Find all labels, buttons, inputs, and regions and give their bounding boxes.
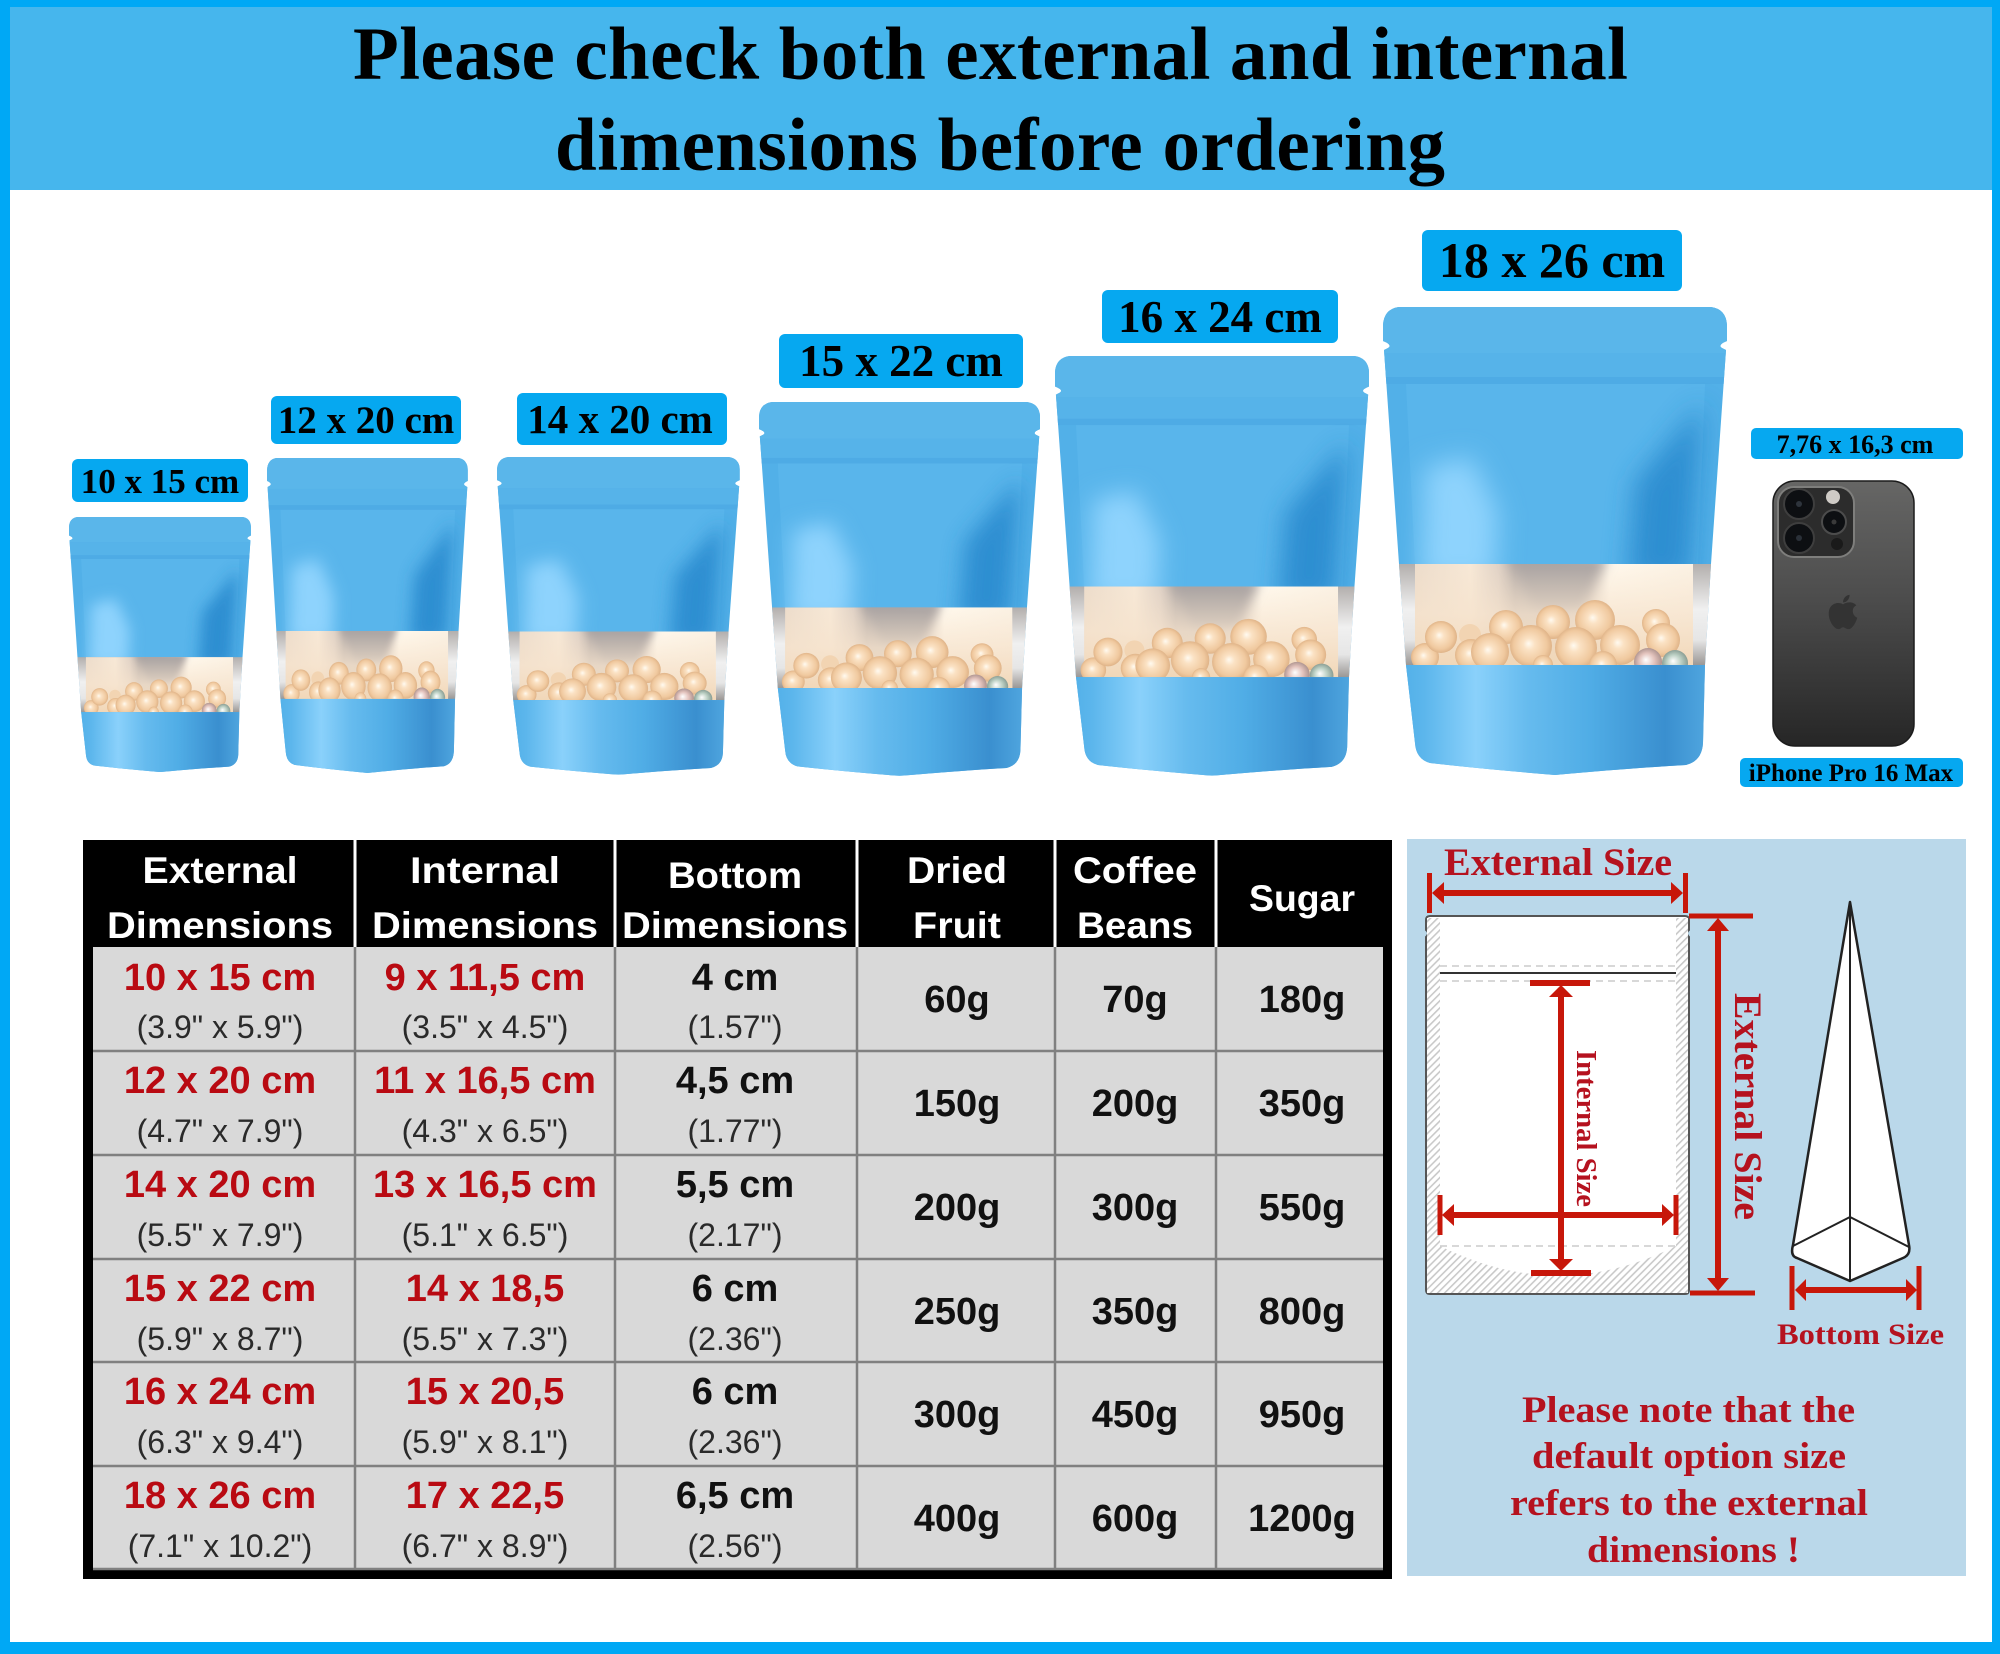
table header: Fruit: [913, 905, 1001, 946]
table row: 10 x 15 cm: 60g: [924, 979, 990, 1021]
table row: 14 x 20 cm: 550g: [1259, 1187, 1345, 1229]
size label: iPhone dimensions: 7,76 x 16,3 cm: [1777, 430, 1934, 459]
table row: 16 x 24 cm: 450g: [1092, 1394, 1178, 1436]
arrow: internal height: [1530, 983, 1591, 1273]
table row: 12 x 20 cm: (1.77"): [688, 1113, 782, 1149]
note text: default option size: [1532, 1436, 1846, 1477]
table row: 14 x 20 cm: 14 x 20 cm: [124, 1164, 316, 1206]
table header: Beans: [1077, 905, 1193, 946]
table row: 14 x 20 cm: 13 x 16,5 cm: [373, 1164, 597, 1206]
title: [353, 13, 1628, 187]
label: internal size: Internal Size: [1570, 1050, 1602, 1207]
pouch: 15 x 22 cm: [759, 402, 1040, 776]
table header: [107, 850, 1355, 946]
table header: Sugar: [1249, 878, 1355, 919]
table header: Internal: [410, 850, 560, 891]
table row: 18 x 26 cm: 17 x 22,5: [406, 1475, 564, 1517]
note text: refers to the external: [1510, 1483, 1868, 1524]
table row: 10 x 15 cm: [124, 957, 1345, 1045]
table row: 14 x 20 cm: 300g: [1092, 1187, 1178, 1229]
table row: 10 x 15 cm: (3.5" x 4.5"): [402, 1009, 568, 1045]
table row: 10 x 15 cm: 70g: [1102, 979, 1168, 1021]
table header: Coffee: [1073, 850, 1197, 891]
note text: Please note that the: [1522, 1390, 1855, 1431]
table row: 16 x 24 cm: 300g: [914, 1394, 1000, 1436]
table row: 14 x 20 cm: 200g: [914, 1187, 1000, 1229]
note text: [1510, 1390, 1868, 1571]
table row: 16 x 24 cm: 16 x 24 cm: [124, 1371, 316, 1413]
label: external size horizontal: External Size: [1444, 841, 1672, 884]
header band: [10, 7, 1992, 190]
table row: 14 x 20 cm: (5.1" x 6.5"): [402, 1217, 568, 1253]
pouch: 12 x 20 cm: [267, 458, 468, 773]
table row: 18 x 26 cm: 400g: [914, 1498, 1000, 1540]
table row: 12 x 20 cm: 4,5 cm: [676, 1060, 794, 1102]
pyramid gusset diagram: [1792, 902, 1909, 1281]
table row: 18 x 26 cm: (2.56"): [688, 1528, 782, 1564]
table row: 15 x 22 cm: (5.9" x 8.7"): [137, 1321, 303, 1357]
table row: 10 x 15 cm: 180g: [1259, 979, 1345, 1021]
arrow: internal width: [1440, 1195, 1676, 1235]
table row: 14 x 20 cm: (2.17"): [688, 1217, 782, 1253]
size label: iPhone Pro 16 Max: iPhone Pro 16 Max: [1749, 760, 1954, 787]
table row: 10 x 15 cm: 10 x 15 cm: [124, 957, 316, 999]
table row: 15 x 22 cm: 14 x 18,5: [406, 1268, 564, 1310]
table row: 12 x 20 cm: 11 x 16,5 cm: [374, 1060, 596, 1102]
table row: 12 x 20 cm: 350g: [1259, 1083, 1345, 1125]
arrow: external height: [1689, 916, 1755, 1293]
panel: size diagram: [1407, 839, 1966, 1576]
table row: 10 x 15 cm: 9 x 11,5 cm: [385, 957, 585, 999]
table row: 15 x 22 cm: (2.36"): [688, 1321, 782, 1357]
table row: 12 x 20 cm: 12 x 20 cm: [124, 1060, 316, 1102]
table row: 12 x 20 cm: 150g: [914, 1083, 1000, 1125]
table row: 15 x 22 cm: [124, 1268, 1345, 1357]
size label: 14 x 20 cm: 14 x 20 cm: [527, 396, 713, 442]
table row: 15 x 22 cm: 15 x 22 cm: [124, 1268, 316, 1310]
arrow: external width: [1430, 873, 1686, 913]
pouch: 14 x 20 cm: [497, 457, 740, 775]
size label: 12 x 20 cm: 12 x 20 cm: [278, 399, 454, 442]
table header: Dimensions: [107, 905, 333, 946]
table row: 10 x 15 cm: (3.9" x 5.9"): [137, 1009, 303, 1045]
table row: 15 x 22 cm: 800g: [1259, 1291, 1345, 1333]
table row: 18 x 26 cm: 600g: [1092, 1498, 1178, 1540]
title: dimensions before ordering: [555, 104, 1445, 187]
table row: 14 x 20 cm: (5.5" x 7.9"): [137, 1217, 303, 1253]
pouch outline diagram: [1426, 916, 1689, 1294]
note text: dimensions !: [1587, 1530, 1800, 1571]
pouch: 10 x 15 cm: [69, 517, 251, 772]
table row: 15 x 22 cm: 350g: [1092, 1291, 1178, 1333]
table row: 14 x 20 cm: 5,5 cm: [676, 1164, 794, 1206]
size label: 16 x 24 cm: 16 x 24 cm: [1118, 292, 1322, 342]
size label: 10 x 15 cm: 10 x 15 cm: [81, 462, 239, 501]
table row: 18 x 26 cm: [124, 1475, 1356, 1564]
table row: 18 x 26 cm: (7.1" x 10.2"): [128, 1528, 312, 1564]
table row: 18 x 26 cm: 18 x 26 cm: [124, 1475, 316, 1517]
label: bottom size: Bottom Size: [1777, 1318, 1944, 1351]
table row: 16 x 24 cm: 15 x 20,5: [406, 1371, 564, 1413]
table row: 16 x 24 cm: (5.9" x 8.1"): [402, 1424, 568, 1460]
table row: 12 x 20 cm: (4.3" x 6.5"): [402, 1113, 568, 1149]
table row: 12 x 20 cm: 200g: [1092, 1083, 1178, 1125]
icon: iPhone back: [1773, 481, 1914, 746]
title: Please check both external and internal: [353, 13, 1628, 96]
table row: 15 x 22 cm: 6 cm: [692, 1268, 778, 1310]
arrow: bottom width: [1792, 1266, 1919, 1310]
size label: iPhone dimensions: [1751, 428, 1963, 459]
table row: 15 x 22 cm: 250g: [914, 1291, 1000, 1333]
table row: 18 x 26 cm: (6.7" x 8.9"): [402, 1528, 568, 1564]
table header: Dimensions: [622, 905, 848, 946]
table row: 10 x 15 cm: 4 cm: [692, 957, 778, 999]
table row: 12 x 20 cm: (4.7" x 7.9"): [137, 1113, 303, 1149]
size comparison table: [83, 840, 1392, 1579]
table row: 15 x 22 cm: (5.5" x 7.3"): [402, 1321, 568, 1357]
label: external size vertical: External Size: [1726, 993, 1769, 1220]
table row: 16 x 24 cm: (6.3" x 9.4"): [137, 1424, 303, 1460]
table row: 18 x 26 cm: 6,5 cm: [676, 1475, 794, 1517]
table row: 18 x 26 cm: 1200g: [1248, 1498, 1356, 1540]
table row: 16 x 24 cm: [124, 1371, 1345, 1460]
size label: 15 x 22 cm: 15 x 22 cm: [799, 336, 1003, 386]
table header: Dimensions: [372, 905, 598, 946]
table row: 16 x 24 cm: 950g: [1259, 1394, 1345, 1436]
table header: Bottom: [668, 855, 802, 896]
table row: 14 x 20 cm: [124, 1164, 1345, 1253]
pouch: 18 x 26 cm: [1383, 307, 1727, 775]
table row: 12 x 20 cm: [124, 1060, 1345, 1149]
size label: 18 x 26 cm: 18 x 26 cm: [1439, 232, 1665, 288]
table row: 10 x 15 cm: (1.57"): [688, 1009, 782, 1045]
table row: 16 x 24 cm: 6 cm: [692, 1371, 778, 1413]
table header: Dried: [907, 850, 1007, 891]
table header: External: [142, 850, 298, 891]
pouch: 16 x 24 cm: [1055, 356, 1369, 776]
table row: 16 x 24 cm: (2.36"): [688, 1424, 782, 1460]
